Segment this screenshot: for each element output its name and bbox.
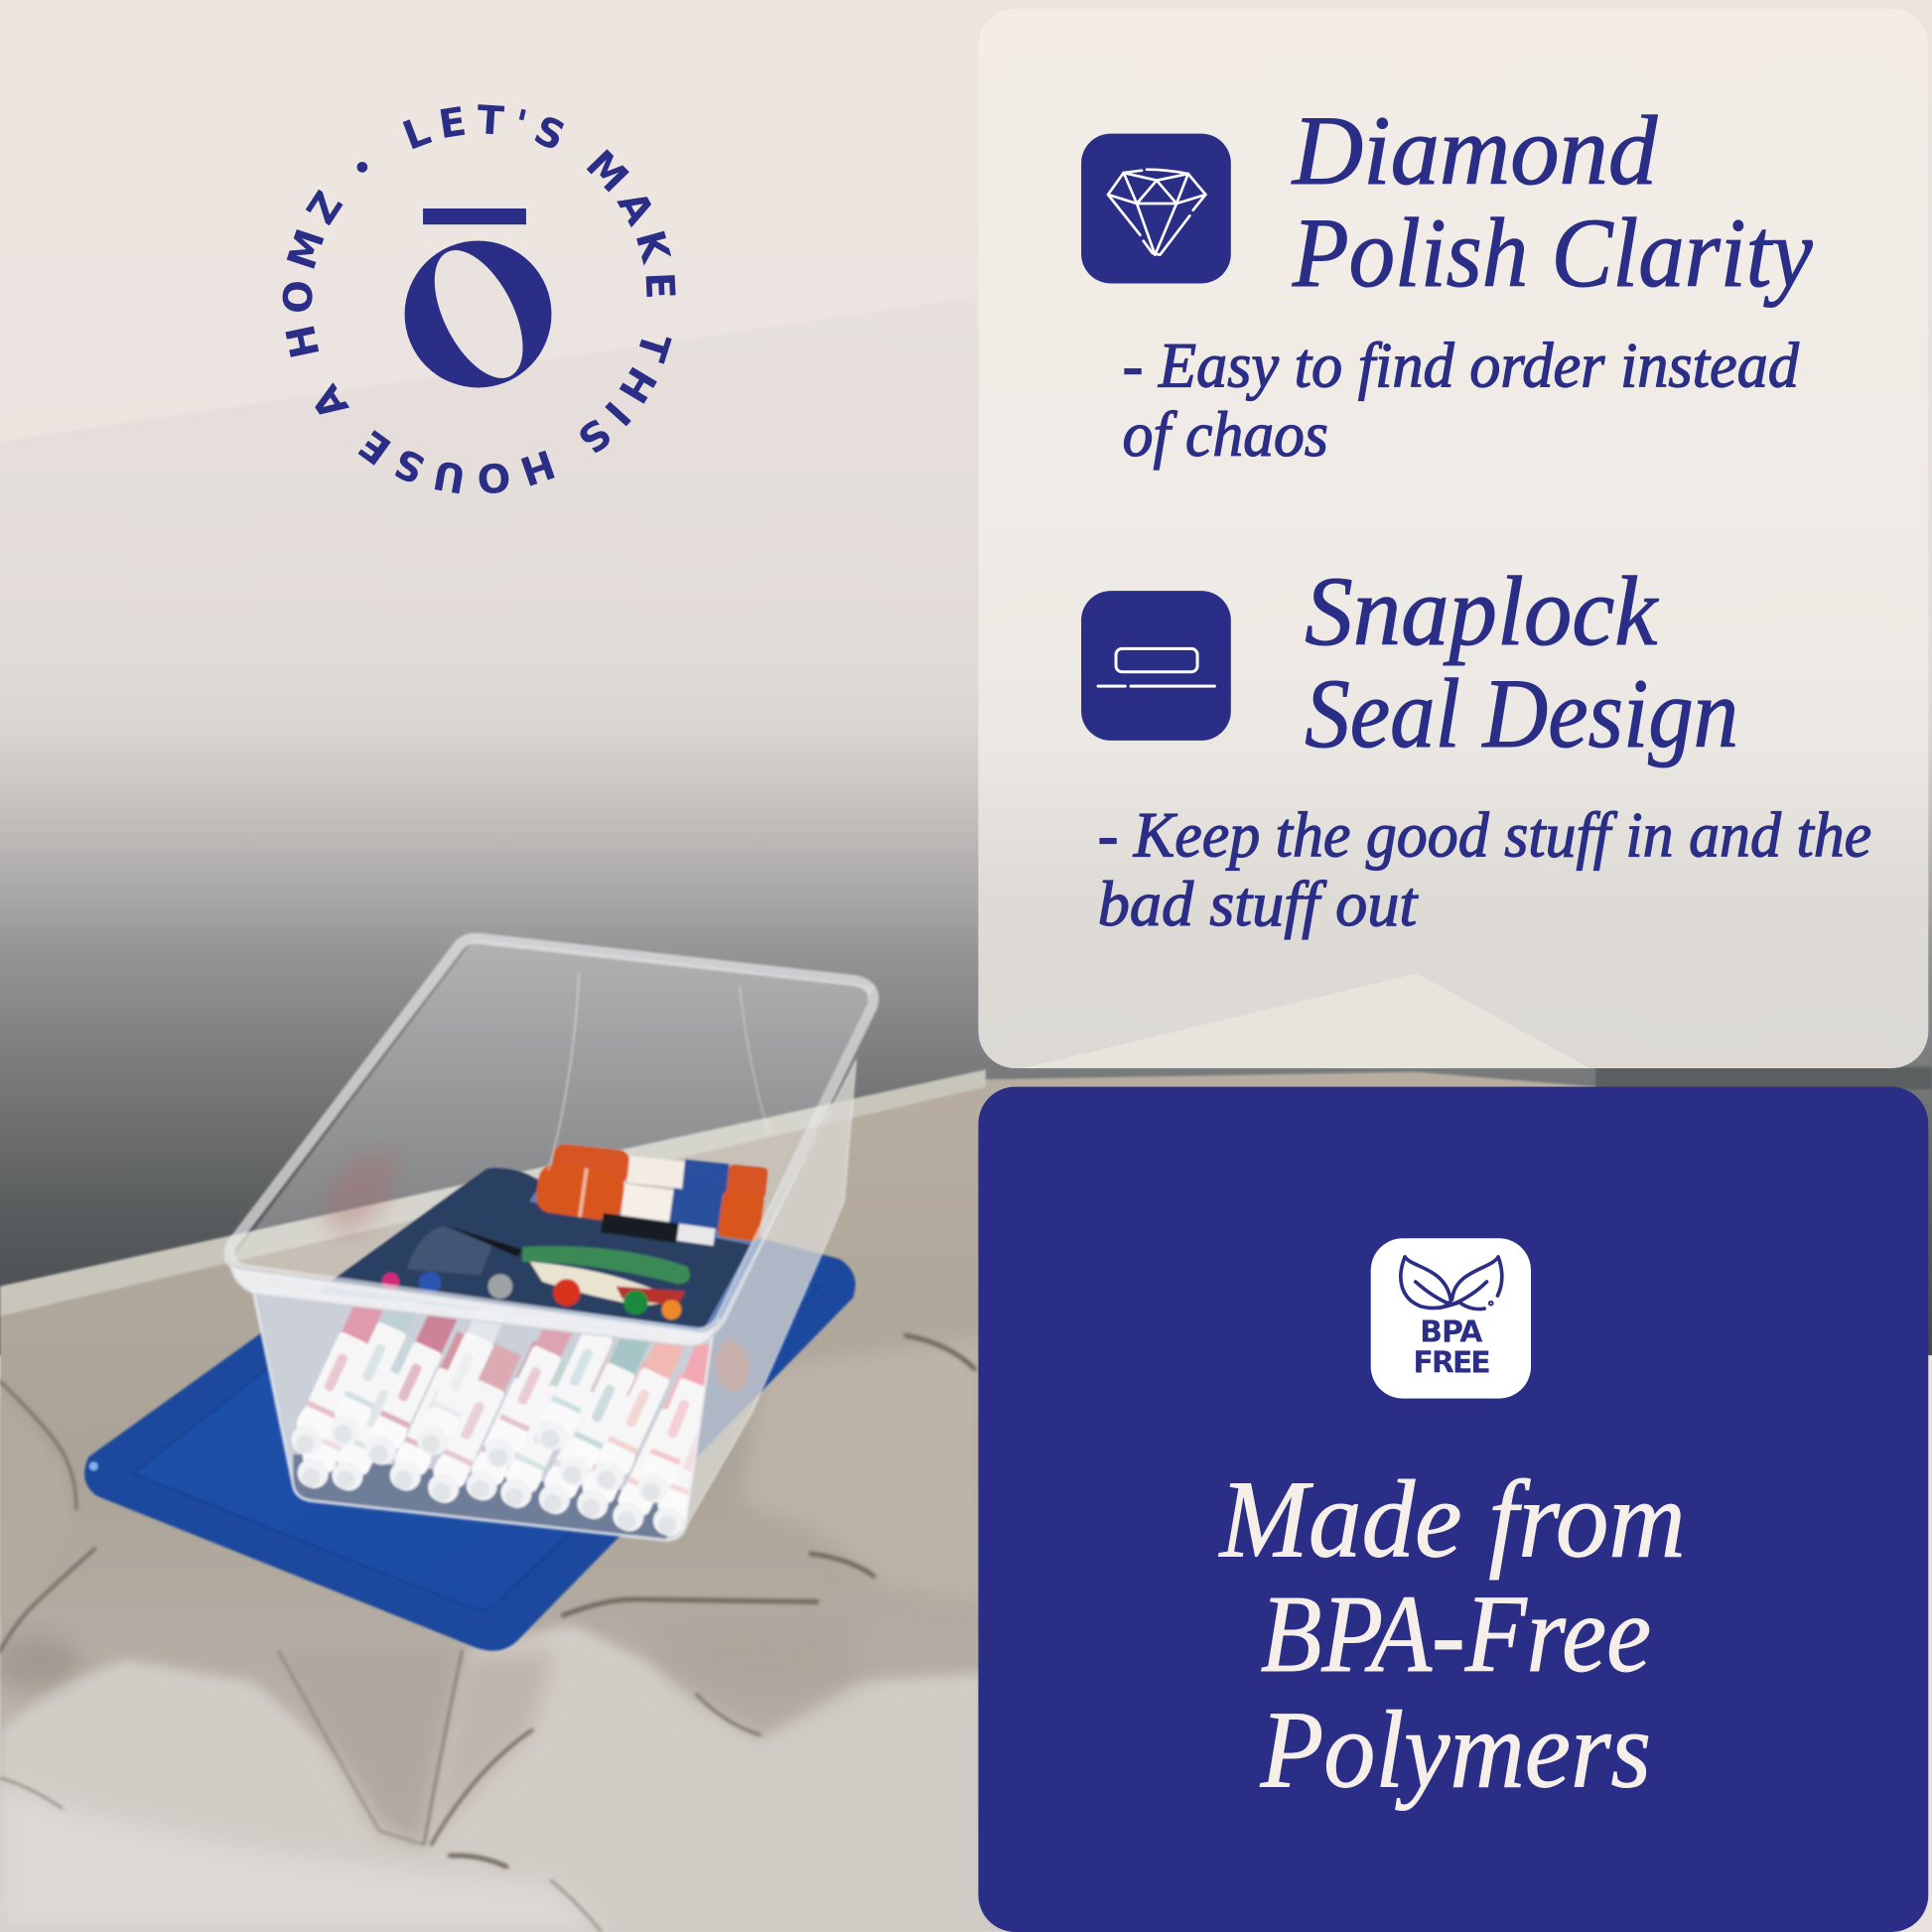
text: keep the good stuff in: bad stuff out bbox=[1098, 868, 1419, 939]
wall bbox=[0, 0, 1932, 1355]
blue lid bbox=[87, 1171, 852, 1648]
box right wall bbox=[685, 1059, 857, 1528]
scissors bbox=[444, 1225, 690, 1307]
text: easy to find order: of chaos bbox=[1123, 398, 1328, 470]
logo bar bbox=[423, 208, 526, 224]
round brand logo bbox=[282, 104, 675, 494]
icon: BPA free leaves: FREE bbox=[1413, 1346, 1491, 1381]
heading: snaplock seal design bbox=[1305, 558, 1738, 768]
panel: features bbox=[978, 9, 1928, 1068]
text: easy to find order bbox=[1123, 330, 1800, 470]
heading: made from BPA-free polymers bbox=[1218, 1457, 1686, 1812]
logo ring bbox=[405, 236, 552, 392]
heading: made from BPA-free polymers: Polymers bbox=[1260, 1689, 1651, 1812]
sofa bbox=[0, 1067, 1932, 1932]
glue sticks bbox=[532, 1143, 768, 1254]
heading: diamond polish clarity: Polish Clarity bbox=[1292, 200, 1813, 308]
markers bbox=[290, 1307, 711, 1537]
logo dot bbox=[357, 162, 367, 173]
circular slogan: LET'S MAKE THIS HOUSE A HOMZ bbox=[282, 104, 675, 494]
box contents floor bbox=[331, 1168, 752, 1328]
box interior back wall bbox=[228, 939, 875, 1332]
sofa cushions and creases bbox=[0, 1335, 986, 1932]
text: keep the good stuff in bbox=[1098, 799, 1871, 939]
wall ledge band bbox=[0, 0, 978, 441]
icon: diamond bbox=[1081, 134, 1231, 283]
storage box bbox=[228, 938, 875, 1541]
background photo: wall, sofa and storage box bbox=[0, 660, 1932, 1932]
marker tips inside box bbox=[382, 1272, 681, 1319]
icon: BPA free leaves bbox=[1371, 1238, 1531, 1399]
reflected shape at card bottom bbox=[1023, 973, 1589, 1068]
heading: diamond polish clarity bbox=[1291, 97, 1813, 308]
text: easy to find order: - Easy to find order instead bbox=[1123, 330, 1800, 401]
icon: snaplock seal bbox=[1081, 591, 1231, 741]
box rim bbox=[229, 938, 874, 1333]
text: keep the good stuff in: - Keep the good stuff in and the bbox=[1098, 799, 1871, 871]
heading: diamond polish clarity: Diamond bbox=[1291, 97, 1658, 206]
translucent card bbox=[978, 9, 1928, 1068]
heading: made from BPA-free polymers: Made from bbox=[1218, 1457, 1686, 1581]
navy card bbox=[978, 1087, 1928, 1932]
box front glass bbox=[252, 1288, 712, 1540]
icon: BPA free leaves: BPA bbox=[1420, 1315, 1483, 1350]
box front wall bbox=[252, 1288, 712, 1540]
heading: snaplock seal design: Seal Design bbox=[1305, 660, 1738, 768]
heading: snaplock seal design: Snaplock bbox=[1305, 558, 1659, 666]
heading: made from BPA-free polymers: BPA-Free bbox=[1261, 1573, 1651, 1696]
panel: BPA free bbox=[978, 1087, 1928, 1932]
